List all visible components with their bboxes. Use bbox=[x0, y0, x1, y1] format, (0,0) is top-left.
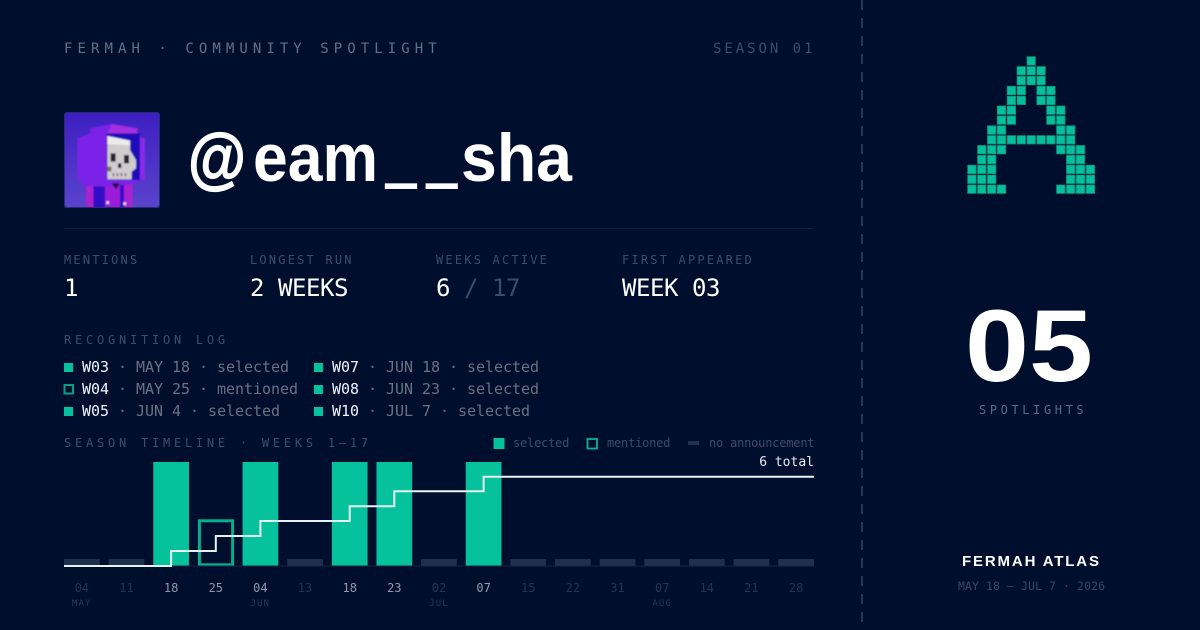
stat: longest run bbox=[250, 253, 354, 302]
stat: first appeared: WEEK 03 bbox=[622, 274, 720, 302]
axis labels: 02 bbox=[432, 581, 446, 595]
log entry W07: W07 · JUN 18 · selected bbox=[332, 358, 539, 376]
cumulative step line bbox=[64, 477, 814, 566]
axis labels: 25 bbox=[209, 581, 223, 595]
timeline heading: SEASON TIMELINE · WEEKS 1–17 bbox=[64, 436, 372, 450]
log entry W05: W05 · JUN 4 · selected bbox=[82, 402, 280, 420]
axis labels: 18 bbox=[164, 581, 178, 595]
total label: 6 total bbox=[759, 455, 814, 470]
stat: weeks active bbox=[436, 253, 549, 302]
recognition log entries bbox=[64, 358, 539, 420]
axis labels: 07 bbox=[655, 581, 669, 595]
legend bbox=[494, 436, 814, 450]
axis labels: 14 bbox=[700, 581, 714, 595]
handle: _ bbox=[386, 118, 416, 194]
axis labels: 11 bbox=[119, 581, 134, 595]
panel divider: dashed bbox=[861, 0, 863, 630]
brand name: FERMAH ATLAS bbox=[962, 553, 1099, 570]
bar chart: weeks 1-17 bbox=[64, 462, 814, 566]
legend: no announcement bbox=[709, 436, 814, 450]
legend: selected bbox=[513, 436, 569, 450]
divider bbox=[64, 228, 814, 229]
axis labels: 28 bbox=[789, 581, 803, 595]
axis labels: JUN bbox=[251, 599, 270, 609]
stat: longest run: LONGEST RUN bbox=[250, 253, 354, 267]
spotlight count: 05 bbox=[965, 289, 1093, 403]
axis labels: 04 bbox=[75, 581, 89, 595]
log entry W03: W03 · MAY 18 · selected bbox=[82, 358, 289, 376]
axis labels: 04 bbox=[253, 581, 268, 595]
axis labels: 15 bbox=[521, 581, 535, 595]
stat: weeks active: 6 / 17 bbox=[436, 274, 520, 302]
log entry W08: W08 · JUN 23 · selected bbox=[332, 380, 539, 398]
header: season: SEASON 01 bbox=[713, 41, 815, 57]
axis labels: 23 bbox=[387, 581, 402, 595]
handle: eam bbox=[253, 120, 378, 196]
axis labels bbox=[72, 581, 803, 609]
stat: mentions bbox=[64, 253, 139, 302]
handle: _ bbox=[426, 118, 457, 194]
handle: sha bbox=[461, 120, 573, 196]
axis labels: JUL bbox=[429, 599, 449, 609]
legend: mentioned bbox=[607, 436, 670, 450]
icon: pixel letter A bbox=[968, 57, 1095, 193]
axis labels: MAY bbox=[72, 599, 92, 609]
avatar: hooded pixel skull bbox=[64, 112, 160, 209]
handle: @ bbox=[188, 120, 246, 196]
axis labels: 18 bbox=[342, 581, 357, 595]
axis labels: AUG bbox=[652, 599, 672, 609]
date range: MAY 18 — JUL 7 · 2026 bbox=[958, 579, 1105, 593]
axis labels: 13 bbox=[298, 581, 312, 595]
axis labels: 31 bbox=[610, 581, 625, 595]
stat: first appeared bbox=[622, 253, 754, 302]
handle bbox=[188, 118, 573, 196]
log entry W10: W10 · JUL 7 · selected bbox=[332, 402, 530, 420]
stat: mentions: MENTIONS bbox=[64, 253, 139, 267]
spotlight caption: SPOTLIGHTS bbox=[979, 403, 1087, 417]
axis labels: 22 bbox=[566, 581, 580, 595]
stat: longest run: 2 WEEKS bbox=[250, 274, 348, 302]
log entry W04: W04 · MAY 25 · mentioned bbox=[82, 380, 298, 398]
header: kicker: FERMAH · COMMUNITY SPOTLIGHT bbox=[64, 41, 442, 57]
recognition log heading: RECOGNITION LOG bbox=[64, 333, 229, 347]
stat: mentions: 1 bbox=[64, 274, 78, 302]
stat: weeks active: WEEKS ACTIVE bbox=[436, 253, 549, 267]
stat: first appeared: FIRST APPEARED bbox=[622, 253, 754, 267]
axis labels: 07 bbox=[476, 581, 491, 595]
axis labels: 21 bbox=[744, 581, 759, 595]
